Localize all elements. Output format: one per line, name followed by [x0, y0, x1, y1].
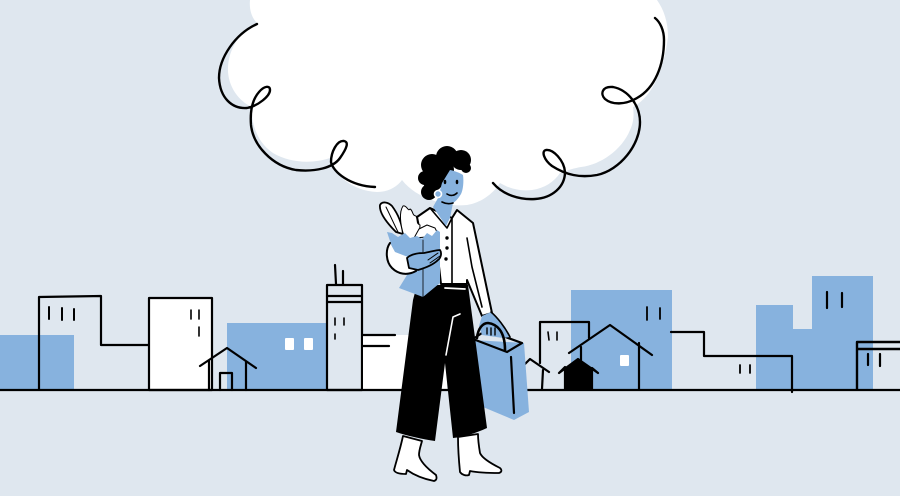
- cloud outline: left swirl: [219, 24, 375, 187]
- person: [380, 146, 529, 481]
- ground line: [0, 389, 900, 391]
- shirt and arm: [417, 208, 492, 316]
- trousers: [396, 285, 487, 441]
- head and hair: [418, 146, 471, 226]
- hand holding shopping bag: [477, 312, 510, 350]
- cloud outline: right swirl: [493, 18, 664, 199]
- grocery bag with baguette and leaves: [380, 202, 440, 297]
- left skyline buildings: [0, 265, 447, 390]
- right skyline buildings: [524, 276, 900, 392]
- thought cloud: [228, 0, 668, 205]
- boots: [394, 434, 501, 481]
- hand holding grocery bag: [407, 250, 441, 270]
- shopping bag: [473, 331, 529, 420]
- sleeve over bag: [387, 243, 416, 274]
